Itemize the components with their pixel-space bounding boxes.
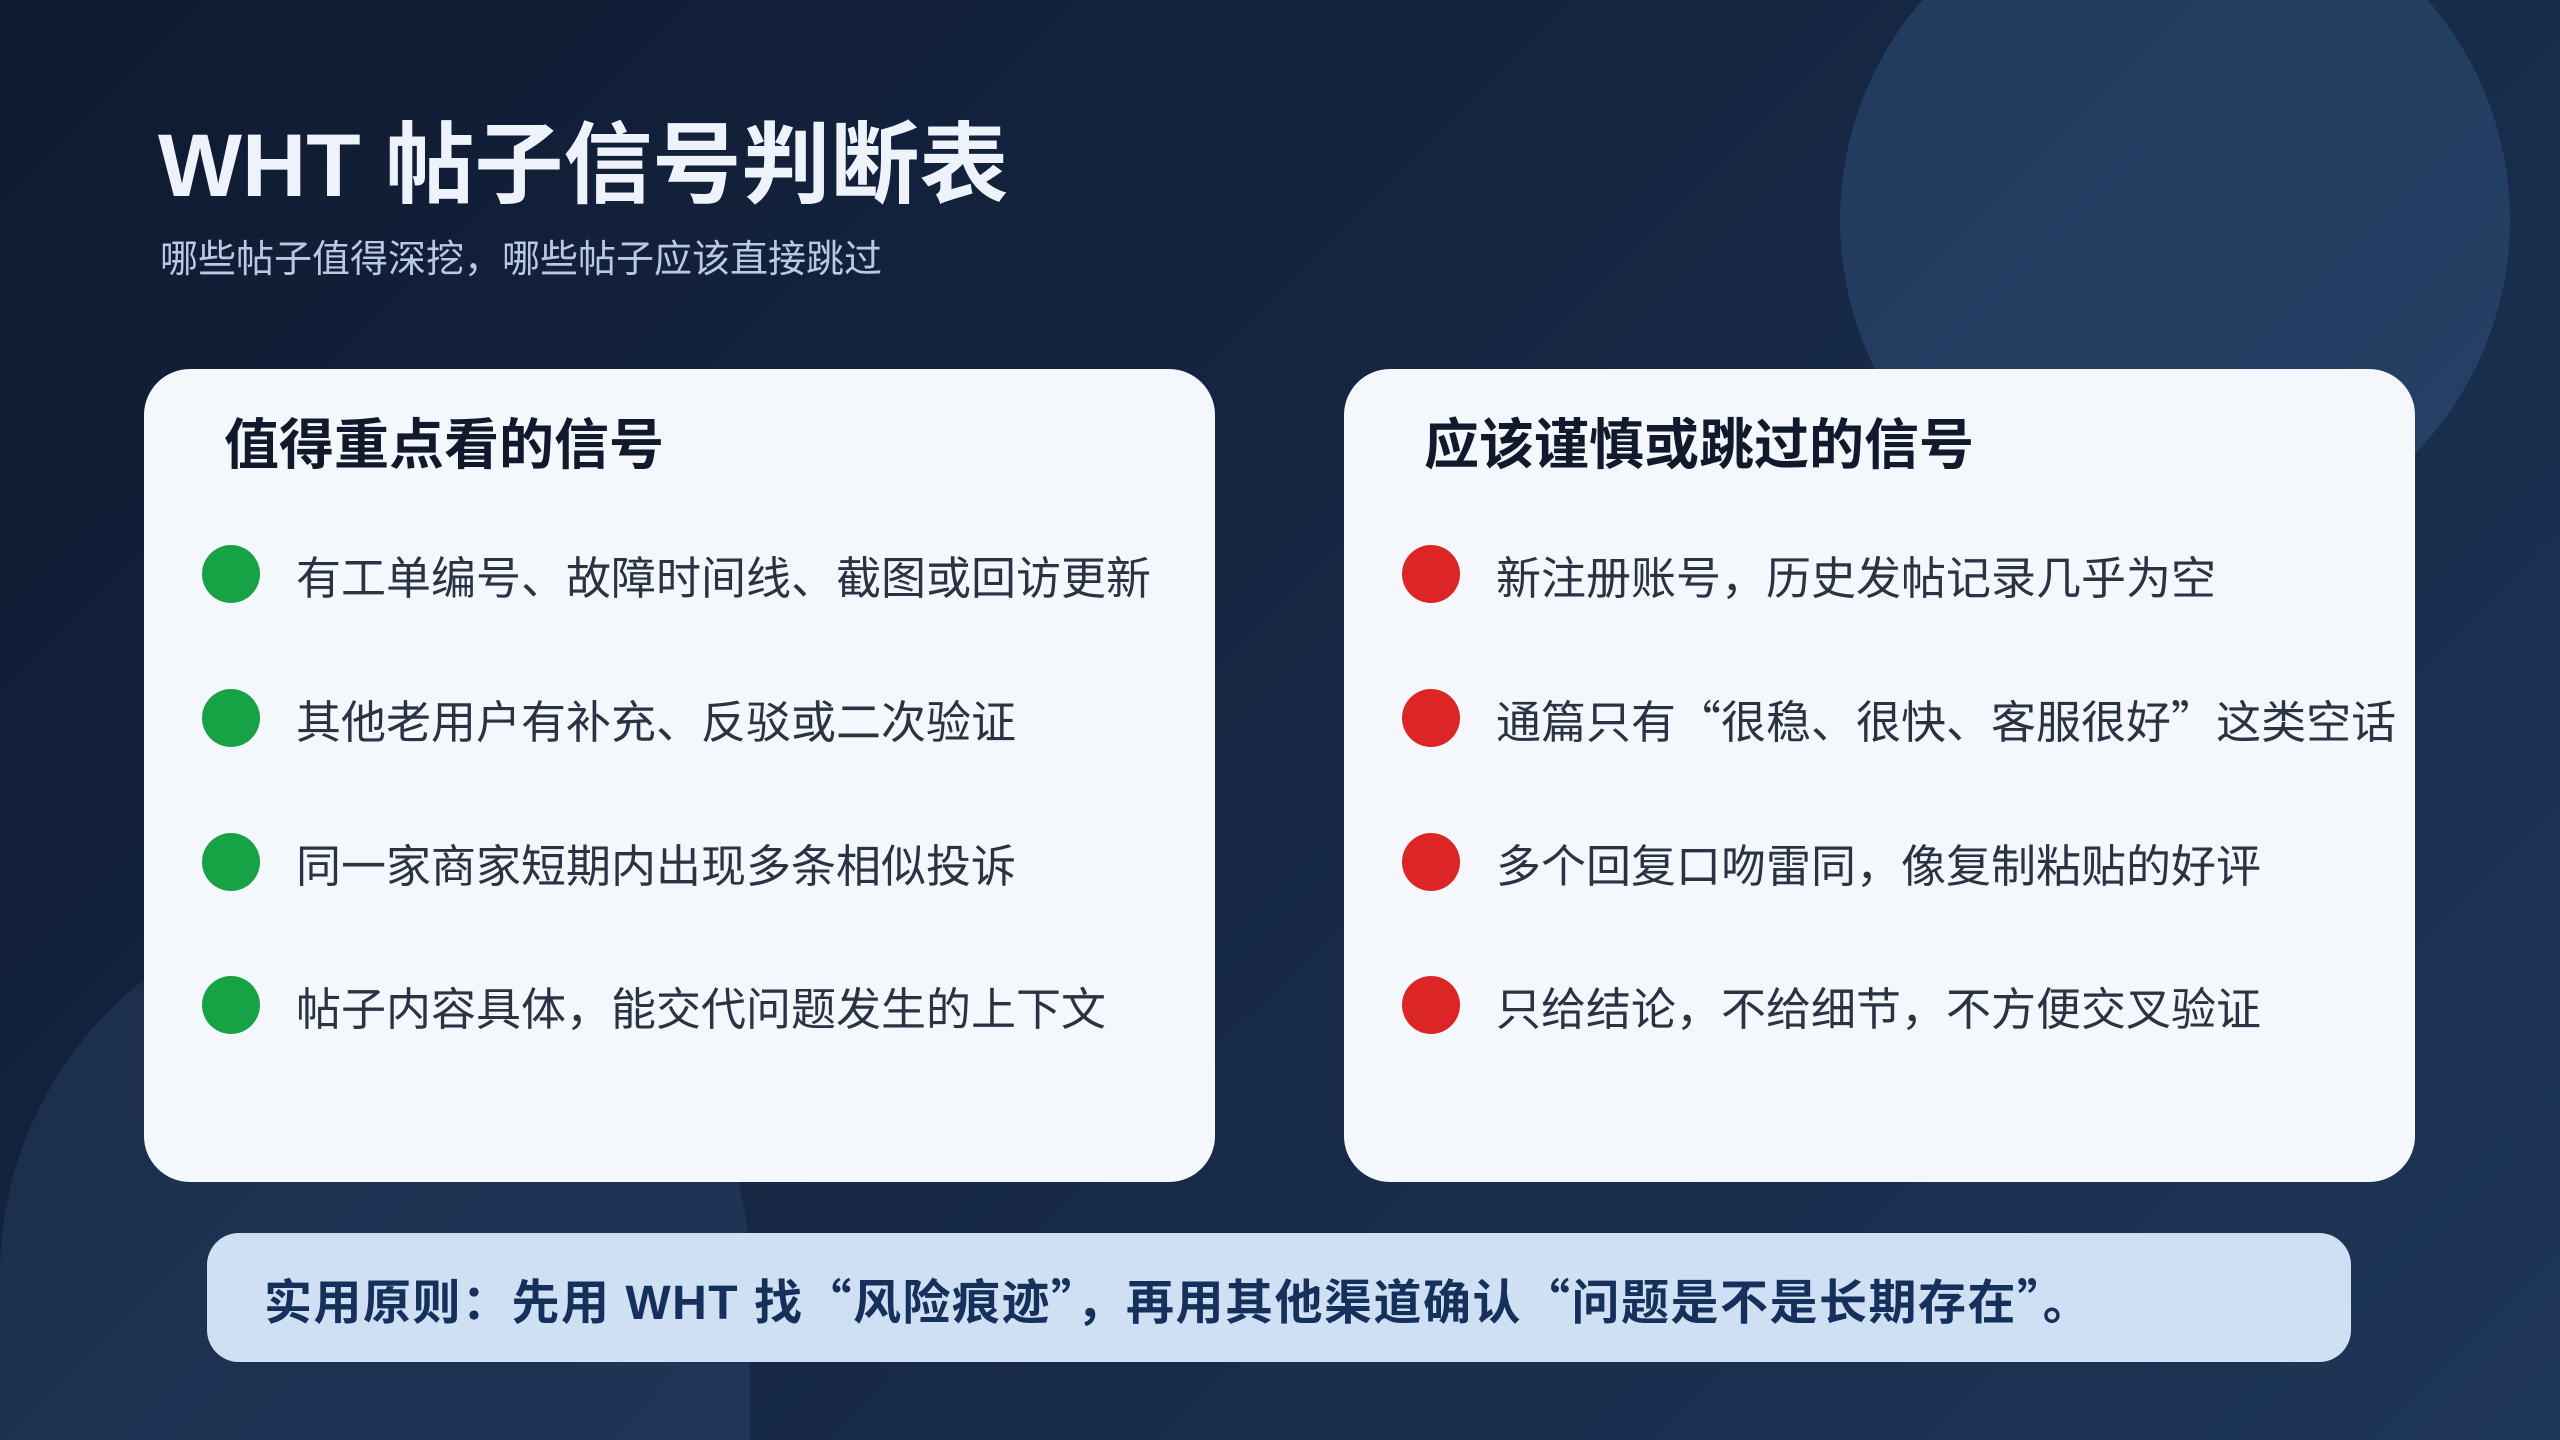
item 2: 其他老用户有补充、反驳或二次验证 bbox=[296, 696, 1016, 748]
background circle bottom left bbox=[0, 900, 750, 1440]
subtitle: 哪些帖子值得深挖，哪些帖子应该直接跳过 bbox=[160, 239, 882, 281]
panel heading: 值得重点看的信号 bbox=[224, 414, 664, 476]
item 3: 同一家商家短期内出现多条相似投诉 bbox=[296, 840, 1016, 892]
panel: worth reading signals bbox=[144, 369, 1215, 1182]
item 4: 只给结论，不给细节，不方便交叉验证 bbox=[1496, 984, 2261, 1034]
item 1: 有工单编号、故障时间线、截图或回访更新 bbox=[296, 552, 1151, 604]
callout: practical principle bbox=[207, 1233, 2351, 1362]
title: WHT 帖子信号判断表 bbox=[158, 115, 1008, 215]
item 2: “ bbox=[1676, 686, 1721, 750]
item 3: 多个回复口吻雷同，像复制粘贴的好评 bbox=[1496, 840, 2261, 892]
item 4: 帖子内容具体，能交代问题发生的上下文 bbox=[296, 984, 1106, 1034]
item 2: ” bbox=[2171, 686, 2216, 750]
panel: caution signals bbox=[1344, 369, 2415, 1182]
panel heading: 应该谨慎或跳过的信号 bbox=[1424, 414, 1974, 476]
item 1: 新注册账号，历史发帖记录几乎为空 bbox=[1496, 552, 2216, 604]
callout: practical principle: 实用原则：先用 WHT 找“风险痕迹”，再用其他渠道确认“问题是不是长期存在”。 bbox=[264, 1262, 2092, 1332]
background circle top right bbox=[1840, 0, 2510, 555]
item 2: 通篇只有 很稳、很快、客服很好 这类空话 bbox=[1496, 696, 2396, 748]
